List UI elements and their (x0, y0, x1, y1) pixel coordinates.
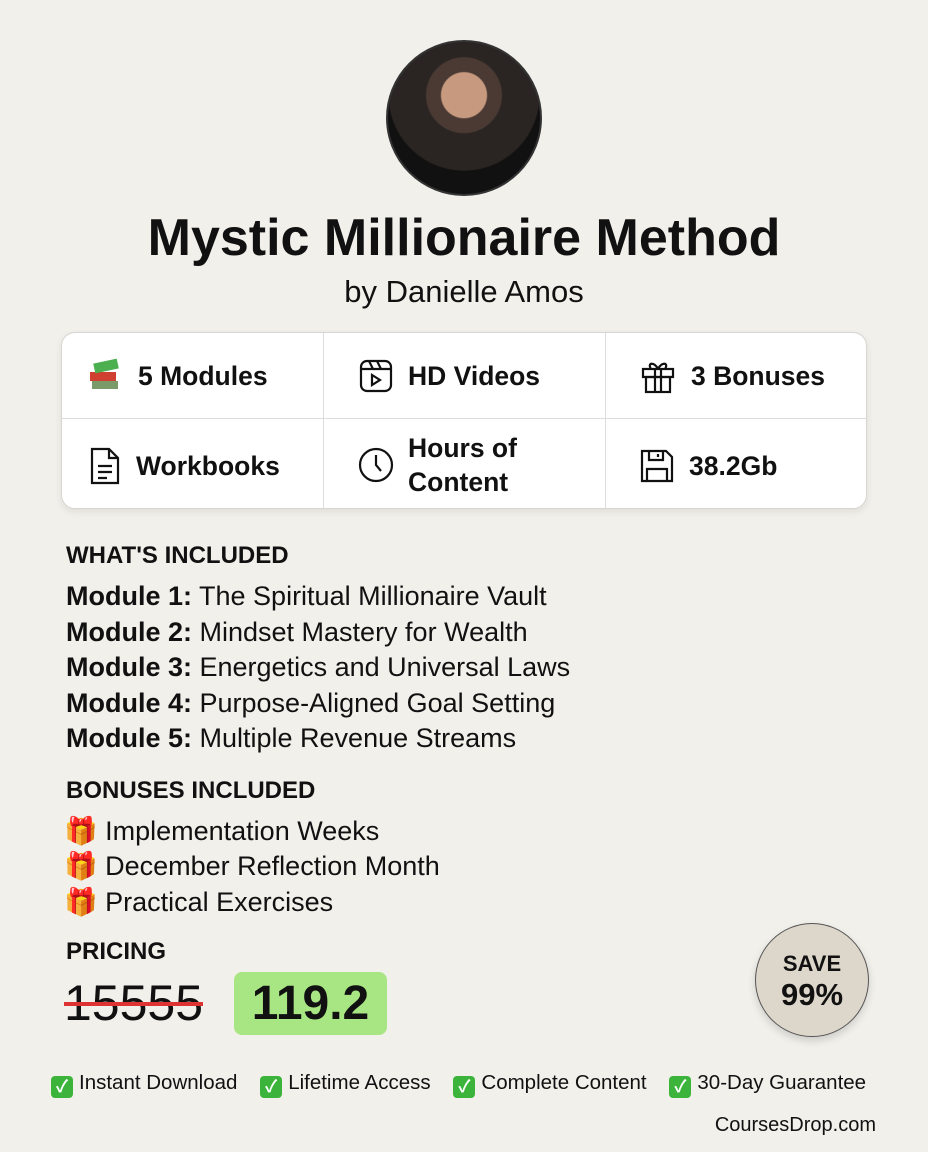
cell: hours of content (358, 433, 517, 497)
cell: hours of content: Hours of (408, 433, 517, 463)
subtitle: by Danielle Amos (344, 274, 584, 309)
footer url: CoursesDrop.com (715, 1114, 876, 1136)
module list: Module 1: The Spiritual Millionaire Vault (66, 581, 547, 611)
guarantees row: Instant Download Lifetime Access Complete Content 30-Day Guarantee (79, 1071, 866, 1094)
module list: Module 3: Energetics and Universal Laws (66, 652, 570, 682)
cell: 38.2Gb: 38.2Gb (689, 450, 777, 480)
bonus list: 🎁 Implementation Weeks (64, 816, 379, 846)
guarantees row: ✓ (458, 1077, 471, 1096)
cell: workbooks (90, 448, 280, 484)
module list: Module 2: Mindset Mastery for Wealth (66, 617, 528, 647)
guarantees row: ✓ (265, 1077, 277, 1096)
heading: pricing: PRICING (66, 938, 166, 965)
bonus list: 🎁 December Reflection Month (64, 851, 440, 881)
cell: 5 modules: 5 Modules (138, 360, 268, 390)
heading: what's included: WHAT'S INCLUDED (66, 542, 289, 569)
new price (234, 972, 387, 1035)
cell: workbooks: Workbooks (136, 450, 280, 480)
cell: hours of content: Content (408, 467, 508, 497)
cell: HD videos: HD Videos (408, 360, 540, 390)
cell: 38.2Gb (640, 450, 777, 482)
save badge (755, 923, 869, 1037)
title: Mystic Millionaire Method (148, 209, 780, 267)
module list: Module 5: Multiple Revenue Streams (66, 723, 516, 753)
guarantees row: ✓ (56, 1077, 68, 1096)
cell: 3 bonuses (642, 360, 825, 394)
bonus list (64, 816, 440, 917)
guarantees row: ✓ (674, 1077, 687, 1096)
save badge: SAVE (783, 951, 841, 976)
bonus list: 🎁 Practical Exercises (64, 887, 333, 917)
save badge: 99% (781, 977, 843, 1012)
cell: HD videos (360, 360, 540, 392)
module list (66, 581, 570, 753)
feature grid card (61, 332, 867, 509)
new price: 119.2 (252, 977, 369, 1030)
cell: 5 modules (90, 358, 268, 390)
module list: Module 4: Purpose-Aligned Goal Setting (66, 688, 555, 718)
old price: 15555 (64, 975, 203, 1031)
cell: 3 bonuses: 3 Bonuses (691, 360, 825, 390)
heading: bonuses included: BONUSES INCLUDED (66, 777, 315, 804)
avatar photo (386, 40, 542, 196)
